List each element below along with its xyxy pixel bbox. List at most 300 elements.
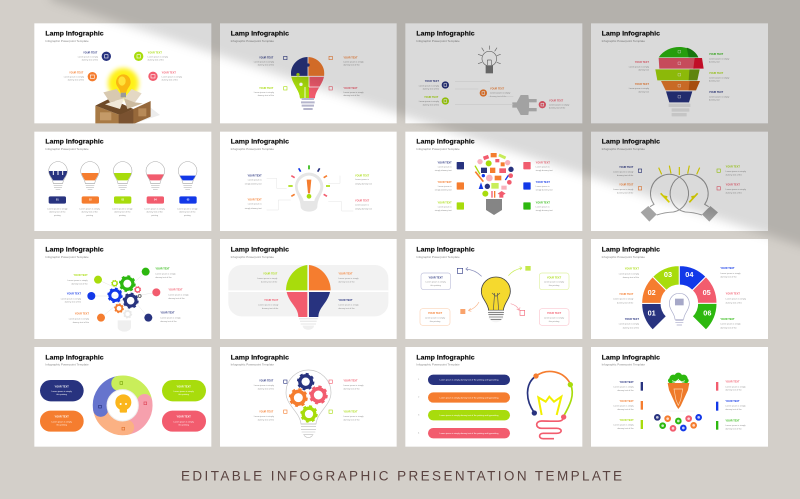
text block: navy bbox=[419, 80, 440, 91]
text block: lime: YOUR TEXT bbox=[73, 274, 88, 277]
pill: pink: Lorem ipsum is simply bbox=[174, 420, 195, 423]
text block: lime: YOUR TEXT bbox=[437, 201, 452, 204]
text block: navy: dummy text of the bbox=[423, 88, 440, 91]
text block: blue bbox=[61, 292, 82, 304]
text block: navy: Lorem ipsum is simply bbox=[613, 386, 635, 389]
text block: orange: dummy text of the bbox=[73, 321, 90, 324]
text block: green bbox=[720, 318, 742, 329]
slide title: Lamp Infographic bbox=[45, 247, 104, 254]
text block: orange bbox=[435, 181, 452, 192]
text block: pink bbox=[355, 200, 372, 211]
chart: six segment ring: 06 bbox=[703, 309, 711, 318]
text block: lime: dummy text of the bbox=[261, 280, 278, 283]
callout: navy: this printing bbox=[430, 284, 441, 287]
chart: colored node cluster bbox=[654, 414, 702, 432]
text block: orange: YOUR TEXT bbox=[69, 71, 84, 74]
text block: pink: YOUR TEXT bbox=[725, 381, 740, 384]
panel: slide 2 puzzle bulb bbox=[220, 23, 397, 123]
slide title bbox=[45, 247, 104, 259]
text block: orange: YOUR TEXT bbox=[619, 293, 634, 296]
callout: navy: YOUR TEXT bbox=[429, 276, 443, 279]
slide title bbox=[231, 354, 290, 367]
text block: lime: dummy text of the bbox=[258, 94, 275, 97]
window light shadow overlay bbox=[50, 0, 800, 262]
icon: pink circle bbox=[152, 288, 160, 296]
callout: pink bbox=[539, 309, 569, 325]
slide title bbox=[231, 31, 290, 43]
slide title: Infographic Powerpoint Template bbox=[416, 148, 461, 151]
text block: orange bbox=[245, 199, 262, 210]
slide title: Infographic Powerpoint Template bbox=[602, 40, 646, 43]
icon: navy outline bbox=[284, 380, 287, 383]
text block: orange bbox=[629, 83, 650, 93]
text block: green bbox=[536, 201, 553, 212]
text block: navy bbox=[709, 91, 730, 102]
slide title: Infographic Powerpoint Template bbox=[416, 256, 461, 259]
slide title: Infographic Powerpoint Template bbox=[45, 40, 90, 43]
chart: six segment ring: 02 bbox=[648, 288, 656, 297]
slide title: Lamp Infographic bbox=[231, 139, 290, 146]
text block: lime: YOUR TEXT bbox=[424, 96, 439, 99]
text block: orange: YOUR TEXT bbox=[635, 83, 649, 86]
icon: pink outline bbox=[520, 310, 525, 315]
text block: navy: Lorem ipsum is simply bbox=[619, 323, 640, 326]
text block: navy: YOUR TEXT bbox=[437, 162, 452, 165]
text block: pink: YOUR TEXT bbox=[726, 183, 740, 186]
callout: orange bbox=[420, 309, 450, 325]
text block: green: YOUR TEXT bbox=[536, 201, 550, 204]
text block: navy bbox=[619, 318, 640, 329]
slide title bbox=[45, 354, 104, 367]
slide title bbox=[602, 31, 661, 43]
panel: slide 13 donut with pills bbox=[34, 347, 211, 447]
icon: blue circle bbox=[87, 292, 95, 300]
text block: lime: dummy text of the bbox=[623, 276, 640, 279]
illustration: outline bulb with gears bbox=[286, 370, 331, 438]
text block: lime bbox=[254, 87, 275, 97]
text block: pink: YOUR TEXT bbox=[264, 299, 279, 302]
callout: orange: YOUR TEXT bbox=[428, 312, 443, 315]
text block: navy: YOUR TEXT bbox=[625, 318, 639, 321]
text block: blue: dummy text of the bbox=[720, 276, 737, 279]
text block: navy: Lorem ipsum is bbox=[248, 178, 262, 181]
captions: printing bbox=[119, 214, 126, 217]
slide title: Lamp Infographic bbox=[231, 31, 290, 38]
text block: pink: dummy text of the bbox=[162, 79, 179, 82]
text block: blue: YOUR TEXT bbox=[725, 400, 740, 403]
text block: lime: dummy text of the bbox=[617, 427, 635, 430]
text block: navy: YOUR TEXT bbox=[425, 80, 439, 83]
arrow: pink bbox=[511, 304, 520, 310]
captions: Lorem ipsum is simply bbox=[47, 207, 68, 210]
text block: blue: simply dummy text bbox=[536, 189, 553, 192]
text block: green: dummy text bbox=[709, 61, 720, 64]
text block: navy: YOUR TEXT bbox=[259, 56, 274, 59]
icon: navy circle bbox=[144, 314, 152, 322]
text block: orange: Lorem ipsum is simply bbox=[490, 92, 511, 95]
chart: layered bulb bbox=[655, 47, 704, 116]
label 02: 02 bbox=[89, 200, 92, 202]
pill: lime bbox=[162, 380, 206, 401]
captions: printing bbox=[184, 214, 191, 217]
bulb 01 navy bbox=[49, 162, 67, 190]
text block: orange bbox=[254, 410, 275, 421]
callout: pink: YOUR TEXT bbox=[547, 312, 562, 315]
illustration: wire bulb bbox=[528, 371, 573, 439]
chart: six segment ring: 04 bbox=[685, 270, 694, 279]
illustration: two crossing bulbs bbox=[641, 166, 718, 222]
text block: pink: dummy text of the bbox=[343, 94, 360, 97]
callout: lime bbox=[539, 273, 569, 290]
text block: orange: Lorem ipsum is simply bbox=[64, 76, 85, 79]
bulb 05 blue bbox=[178, 162, 197, 190]
panel: slide 6 exclamation bulb bbox=[220, 132, 397, 231]
text block: blue: dummy text of the bbox=[725, 408, 742, 411]
illustration: carrot bbox=[662, 373, 695, 411]
icon: pink circle bbox=[539, 101, 546, 108]
text block: navy bbox=[78, 51, 99, 62]
icon: orange square bbox=[457, 182, 464, 190]
callout: lime: Lorem ipsum is simply bbox=[544, 281, 565, 284]
chart: six segment ring: 05 bbox=[703, 288, 711, 297]
captions: Lorem ipsum is simply bbox=[112, 207, 133, 210]
pill: pink: this printing bbox=[178, 424, 189, 427]
text block: orange: simply dummy text bbox=[245, 207, 262, 210]
text block: green: YOUR TEXT bbox=[709, 53, 724, 56]
text block: lime: YOUR TEXT bbox=[619, 419, 634, 422]
pill: lime: this printing bbox=[178, 393, 189, 396]
text block: orange: YOUR TEXT bbox=[619, 184, 634, 187]
text block: lime bbox=[709, 72, 730, 83]
text block: lime: dummy text of the bbox=[423, 103, 440, 106]
text block: orange bbox=[490, 88, 511, 98]
text block: pink: simply dummy text bbox=[536, 169, 553, 172]
text block: lime: Lorem ipsum is simply bbox=[613, 424, 635, 427]
icon: lime circle bbox=[134, 52, 143, 61]
label 05 bbox=[179, 196, 197, 204]
icon: lime solid bbox=[525, 266, 531, 271]
captions: dummy text of the bbox=[114, 210, 131, 213]
text block: navy: YOUR TEXT bbox=[619, 381, 634, 384]
caption: EDITABLE INFOGRAPHIC PRESENTATION TEMPLATE bbox=[181, 468, 622, 484]
text block: pink bbox=[343, 379, 365, 390]
icon: orange outline bbox=[329, 56, 332, 60]
text block: pink bbox=[343, 87, 365, 97]
slide title bbox=[602, 354, 661, 367]
panel: slide 7 icon bulb bbox=[405, 132, 582, 231]
text block: green bbox=[725, 419, 747, 430]
text block: navy: simply dummy text bbox=[435, 169, 452, 172]
text block: lime bbox=[148, 51, 169, 62]
text block: orange bbox=[613, 293, 634, 304]
text block: pink: Lorem ipsum is simply bbox=[343, 91, 365, 94]
slide title: Lamp Infographic bbox=[45, 354, 104, 361]
label 02 bbox=[82, 196, 99, 204]
slide title: Lamp Infographic bbox=[231, 354, 290, 361]
text block: navy: Lorem ipsum is simply bbox=[338, 304, 360, 307]
text block: lime: YOUR TEXT bbox=[148, 51, 162, 54]
icon: orange circle bbox=[97, 314, 105, 322]
icon: orange outline bbox=[638, 187, 642, 190]
icon: pink outline bbox=[717, 187, 720, 190]
icon: segment markers bbox=[99, 382, 147, 430]
slide title bbox=[416, 139, 475, 151]
row 4 pink: 4 bbox=[418, 432, 420, 434]
text block: orange: YOUR TEXT bbox=[247, 199, 262, 202]
panel: slide 1 lamp in box bbox=[34, 23, 211, 123]
panel: slide 12 numbered ring bbox=[591, 239, 768, 339]
row 4 pink: Lorem ipsum is simply dummy text of the printing and typesetting bbox=[440, 432, 498, 435]
text block: navy: YOUR TEXT bbox=[83, 51, 98, 54]
bulb 04 pink bbox=[146, 162, 165, 190]
text block: pink bbox=[726, 293, 747, 304]
pill: navy: Lorem ipsum is simply bbox=[52, 390, 73, 393]
text block: orange: Lorem ipsum is simply bbox=[613, 405, 635, 408]
slide title: Infographic Powerpoint Template bbox=[231, 148, 275, 151]
icon: navy outline bbox=[284, 56, 287, 60]
text block: pink: Lorem ipsum is simply bbox=[549, 103, 570, 106]
text block: navy bbox=[338, 299, 360, 310]
pill: orange bbox=[40, 411, 84, 432]
text block: navy: YOUR TEXT bbox=[259, 379, 274, 382]
text block: orange bbox=[338, 272, 360, 283]
illustration: bulb of small icons bbox=[475, 153, 514, 215]
label 03 bbox=[114, 196, 131, 204]
text block: green: Lorem ipsum is simply bbox=[709, 57, 730, 60]
slide title: Infographic Powerpoint Template bbox=[45, 256, 90, 259]
chart: six segment ring: 01 bbox=[648, 309, 656, 318]
icon: navy circle bbox=[102, 52, 111, 61]
pill: pink: YOUR TEXT bbox=[177, 416, 191, 419]
text block: blue: Lorem ipsum is bbox=[536, 185, 550, 188]
text block: pink: dummy text of the bbox=[726, 301, 743, 304]
slide title: Lamp Infographic bbox=[416, 31, 475, 38]
text block: pink: Lorem ipsum is simply bbox=[726, 188, 747, 191]
row 1 navy: Lorem ipsum is simply dummy text of the printing and typesetting bbox=[440, 379, 498, 382]
text block: pink: Lorem ipsum is simply bbox=[629, 65, 650, 68]
text block: pink: YOUR TEXT bbox=[536, 162, 550, 165]
text block: pink bbox=[726, 183, 747, 195]
icon: navy circle bbox=[442, 81, 449, 89]
text block: orange: simply dummy text bbox=[435, 189, 452, 192]
slide title: Infographic Powerpoint Template bbox=[416, 364, 461, 367]
text block: orange: YOUR TEXT bbox=[338, 272, 353, 275]
text block: pink: Lorem ipsum is simply bbox=[725, 385, 747, 388]
text block: lime bbox=[67, 274, 89, 285]
icon: pink outline bbox=[329, 380, 332, 383]
text block: lime: dummy text of the bbox=[343, 418, 360, 421]
row 2 orange: Lorem ipsum is simply dummy text of the printing and typesetting bbox=[440, 396, 498, 399]
callout: orange: this printing bbox=[430, 320, 440, 323]
text block: orange: Lorem ipsum is simply bbox=[629, 87, 650, 90]
slide title: Lamp Infographic bbox=[416, 354, 475, 361]
pill: navy bbox=[40, 380, 84, 401]
text block: orange bbox=[343, 56, 365, 66]
icon: lime square bbox=[457, 202, 464, 210]
callout: navy: Lorem ipsum is simply bbox=[426, 281, 447, 284]
text block: green: dummy text of the bbox=[725, 427, 742, 430]
text block: orange: Lorem ipsum is simply bbox=[69, 318, 90, 321]
text block: navy: Lorem ipsum is simply bbox=[160, 316, 182, 319]
text block: navy bbox=[160, 311, 182, 323]
text block: lime: Lorem ipsum is simply bbox=[343, 415, 365, 418]
text block: pink: Lorem ipsum is simply bbox=[162, 76, 183, 79]
icon: lime outline bbox=[329, 410, 332, 413]
text block: navy: YOUR TEXT bbox=[247, 174, 262, 177]
slide title: Lamp Infographic bbox=[231, 247, 290, 254]
text block: navy: Lorem ipsum is simply bbox=[709, 95, 730, 98]
icon: lime circle bbox=[442, 97, 449, 105]
text block: pink: dummy text of the bbox=[549, 107, 566, 110]
arrow: orange bbox=[468, 302, 479, 311]
text block: navy: YOUR TEXT bbox=[709, 91, 724, 94]
text block: blue: YOUR TEXT bbox=[536, 181, 550, 184]
text block: navy bbox=[613, 166, 634, 177]
pill: navy: this printing bbox=[56, 393, 67, 396]
icon: navy outline bbox=[638, 169, 642, 172]
text block: lime: Lorem ipsum is simply bbox=[257, 277, 278, 280]
panel: slide 8 crossed bulbs bbox=[591, 132, 768, 231]
icon: central yellow bulb bbox=[115, 394, 131, 413]
text block: orange: dummy text bbox=[638, 90, 649, 93]
text block: orange bbox=[613, 184, 634, 195]
text block: lime: YOUR TEXT bbox=[259, 87, 274, 90]
row 4 pink bbox=[418, 428, 510, 438]
slide title: Lamp Infographic bbox=[602, 31, 661, 38]
text block: blue bbox=[536, 181, 553, 192]
text block: pink bbox=[258, 299, 279, 310]
text block: orange: YOUR TEXT bbox=[259, 410, 274, 413]
text block: lime: Lorem ipsum is simply bbox=[148, 56, 169, 59]
text block: navy: Lorem ipsum is simply bbox=[254, 384, 275, 387]
text block: orange: Lorem ipsum is simply bbox=[338, 277, 360, 280]
arrow: navy bbox=[466, 267, 482, 276]
icon: outline lamp with rays bbox=[478, 46, 501, 73]
pill: orange: YOUR TEXT bbox=[55, 416, 69, 419]
icon: orange circle bbox=[480, 89, 487, 97]
slide title: Infographic Powerpoint Template bbox=[416, 40, 461, 43]
panel: slide 5 five bulbs bbox=[34, 132, 211, 231]
bar: blue bbox=[716, 402, 718, 411]
text block: lime: Lorem ipsum is simply bbox=[709, 76, 730, 79]
text block: lime: YOUR TEXT bbox=[709, 72, 724, 75]
text block: blue: YOUR TEXT bbox=[67, 292, 81, 295]
slide title: Infographic Powerpoint Template bbox=[231, 364, 275, 367]
text block: orange: dummy text of the bbox=[343, 63, 360, 66]
label 01: 01 bbox=[56, 200, 59, 202]
text block: lime: dummy text of the bbox=[71, 282, 89, 285]
text block: blue: Lorem ipsum is simply bbox=[61, 297, 82, 300]
text block: pink bbox=[629, 61, 650, 71]
row 1 navy bbox=[418, 375, 510, 385]
text block: lime bbox=[257, 272, 278, 283]
bar: navy bbox=[641, 382, 643, 391]
bar: lime bbox=[641, 420, 643, 429]
slide title bbox=[416, 31, 475, 43]
text block: pink: dummy text bbox=[638, 68, 649, 71]
text block: green: YOUR TEXT bbox=[720, 318, 735, 321]
text block: navy: dummy text of the bbox=[623, 326, 640, 329]
row 3 lime: 3 bbox=[418, 414, 420, 416]
text block: lime bbox=[343, 410, 365, 421]
panel: slide 10 quartered bulb bbox=[220, 239, 397, 339]
text block: lime: dummy text of the bbox=[148, 59, 165, 62]
text block: navy bbox=[613, 381, 635, 392]
text block: orange: dummy text of the bbox=[617, 408, 635, 411]
text block: navy bbox=[254, 56, 275, 66]
text block: orange: YOUR TEXT bbox=[619, 400, 634, 403]
text block: orange: Lorem ipsum is simply bbox=[613, 298, 634, 301]
pill: lime: YOUR TEXT bbox=[177, 385, 191, 388]
text block: pink: YOUR TEXT bbox=[162, 71, 176, 74]
chart: four quadrant bulb bbox=[286, 265, 331, 330]
icon: green square bbox=[523, 202, 531, 210]
slide title bbox=[231, 139, 290, 151]
chart: spiral donut bbox=[93, 376, 152, 435]
text block: lime: simply dummy text bbox=[435, 209, 452, 212]
icon: orange outline bbox=[284, 410, 287, 413]
pill: pink bbox=[162, 411, 206, 432]
text block: orange: dummy text of the bbox=[258, 418, 275, 421]
text block: green bbox=[155, 268, 177, 279]
slide title: Infographic Powerpoint Template bbox=[602, 364, 646, 367]
row 2 orange: 2 bbox=[418, 397, 420, 399]
text block: orange: dummy text of the bbox=[617, 192, 634, 195]
text block: pink bbox=[549, 99, 570, 110]
callout: lime: YOUR TEXT bbox=[547, 276, 562, 279]
text block: lime bbox=[435, 201, 452, 212]
icon: blue square bbox=[523, 182, 531, 190]
slide title: Infographic Powerpoint Template bbox=[602, 256, 646, 259]
text block: lime: YOUR TEXT bbox=[355, 174, 370, 177]
label 03: 03 bbox=[121, 200, 125, 202]
text block: navy: dummy text of the bbox=[617, 389, 635, 392]
illustration: gray plug bbox=[512, 95, 537, 115]
text block: pink: Lorem ipsum is bbox=[355, 204, 369, 207]
text block: pink: Lorem ipsum is simply bbox=[343, 384, 365, 387]
text block: lime: YOUR TEXT bbox=[625, 268, 639, 271]
text block: navy bbox=[254, 379, 275, 390]
bar: pink bbox=[716, 382, 718, 391]
captions: printing bbox=[54, 214, 61, 217]
text block: orange: dummy text of the bbox=[490, 95, 507, 98]
text block: pink bbox=[168, 289, 190, 300]
text block: green: Lorem ipsum is simply bbox=[155, 272, 177, 275]
icon: navy outline bbox=[457, 268, 463, 273]
text block: lime: YOUR TEXT bbox=[263, 272, 278, 275]
text block: navy bbox=[435, 162, 452, 172]
text block: green: dummy text of the bbox=[155, 276, 172, 279]
chart: puzzle bulb bbox=[290, 56, 327, 109]
slide title: Infographic Powerpoint Template bbox=[45, 148, 90, 151]
text block: navy: Lorem ipsum is simply bbox=[419, 84, 440, 87]
text block: navy: Lorem ipsum is simply bbox=[254, 60, 275, 63]
text block: blue: dummy text of the bbox=[65, 301, 82, 304]
text block: navy: dummy text of the bbox=[82, 59, 99, 62]
text block: blue bbox=[720, 267, 742, 279]
panel: slide 4 layered bulb bbox=[591, 23, 768, 123]
text block: pink: dummy text of the bbox=[726, 192, 743, 195]
text block: green bbox=[709, 53, 730, 64]
text block: navy: dummy text of the bbox=[617, 174, 634, 177]
slide title bbox=[602, 247, 661, 259]
callout: navy bbox=[421, 273, 451, 290]
slide title: Lamp Infographic bbox=[416, 139, 475, 146]
bar: orange bbox=[641, 401, 643, 410]
slide title bbox=[602, 139, 661, 151]
label 05: 05 bbox=[187, 200, 190, 202]
text block: orange: Lorem ipsum is bbox=[438, 185, 452, 188]
